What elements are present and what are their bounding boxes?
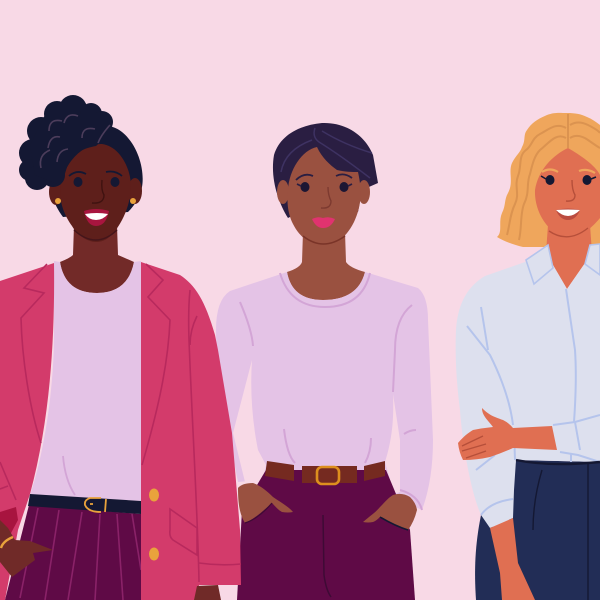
lilac top (216, 272, 433, 510)
pocket edge (380, 517, 408, 530)
buckle (317, 467, 339, 484)
shirt fold (63, 456, 75, 495)
neck and chest (60, 225, 134, 293)
collar (526, 244, 600, 284)
trousers (237, 470, 415, 600)
hair highlights (281, 128, 372, 178)
bracelet (1, 537, 13, 548)
nose (321, 187, 331, 208)
left hand in pocket (238, 483, 293, 523)
face (535, 148, 600, 237)
hair back (273, 123, 378, 218)
smile (556, 208, 580, 220)
neck and chest (546, 225, 592, 289)
ears (49, 179, 63, 205)
jaw line (549, 228, 588, 237)
gap between arm and torso left (233, 360, 266, 482)
blazer right panel (141, 262, 241, 600)
person: blonde woman in blue shirt (right) (456, 113, 600, 600)
person: woman in pink blazer (left) (0, 95, 241, 600)
crease (323, 515, 331, 597)
eyes and brows (296, 174, 352, 192)
nose (566, 180, 575, 201)
cuff (0, 507, 18, 535)
crossed forearm and hand (458, 408, 557, 460)
neck and chest (287, 232, 365, 300)
fold lines (240, 273, 422, 510)
lower hand (194, 585, 221, 600)
skirt (5, 505, 141, 600)
trousers (475, 460, 600, 600)
skirt pleats (20, 508, 141, 600)
eyes and brows (541, 170, 596, 185)
smile (84, 209, 109, 226)
hair back (48, 125, 143, 217)
shirt lines (467, 289, 600, 515)
finger lines (462, 436, 486, 458)
jaw line (74, 230, 117, 240)
blazer buttons (149, 488, 159, 502)
person: woman in lilac top (centre) (216, 123, 433, 600)
curl highlights (40, 115, 110, 168)
blazer left panel (0, 263, 54, 600)
eyes and brows (69, 172, 122, 187)
jaw line (303, 236, 345, 244)
wavy hair (497, 113, 600, 247)
buckle (85, 498, 106, 512)
belt (28, 494, 141, 514)
earrings (55, 198, 61, 204)
blazer lines (0, 264, 241, 582)
right hand in pocket (363, 494, 417, 530)
white top (30, 261, 141, 501)
trouser creases (533, 464, 588, 600)
lips (312, 217, 335, 228)
ear left (277, 180, 289, 204)
hand (0, 520, 53, 577)
hair lines (507, 114, 600, 240)
lower forearm (490, 518, 535, 600)
ear right (358, 180, 370, 204)
pocket edge left (245, 503, 272, 523)
face (60, 144, 131, 242)
belt (265, 461, 385, 484)
waistband line (516, 460, 600, 464)
gap between arm and torso right (385, 394, 400, 494)
shirt (456, 245, 600, 528)
face (288, 147, 361, 246)
nose (92, 180, 104, 203)
curly hair top (19, 95, 113, 190)
